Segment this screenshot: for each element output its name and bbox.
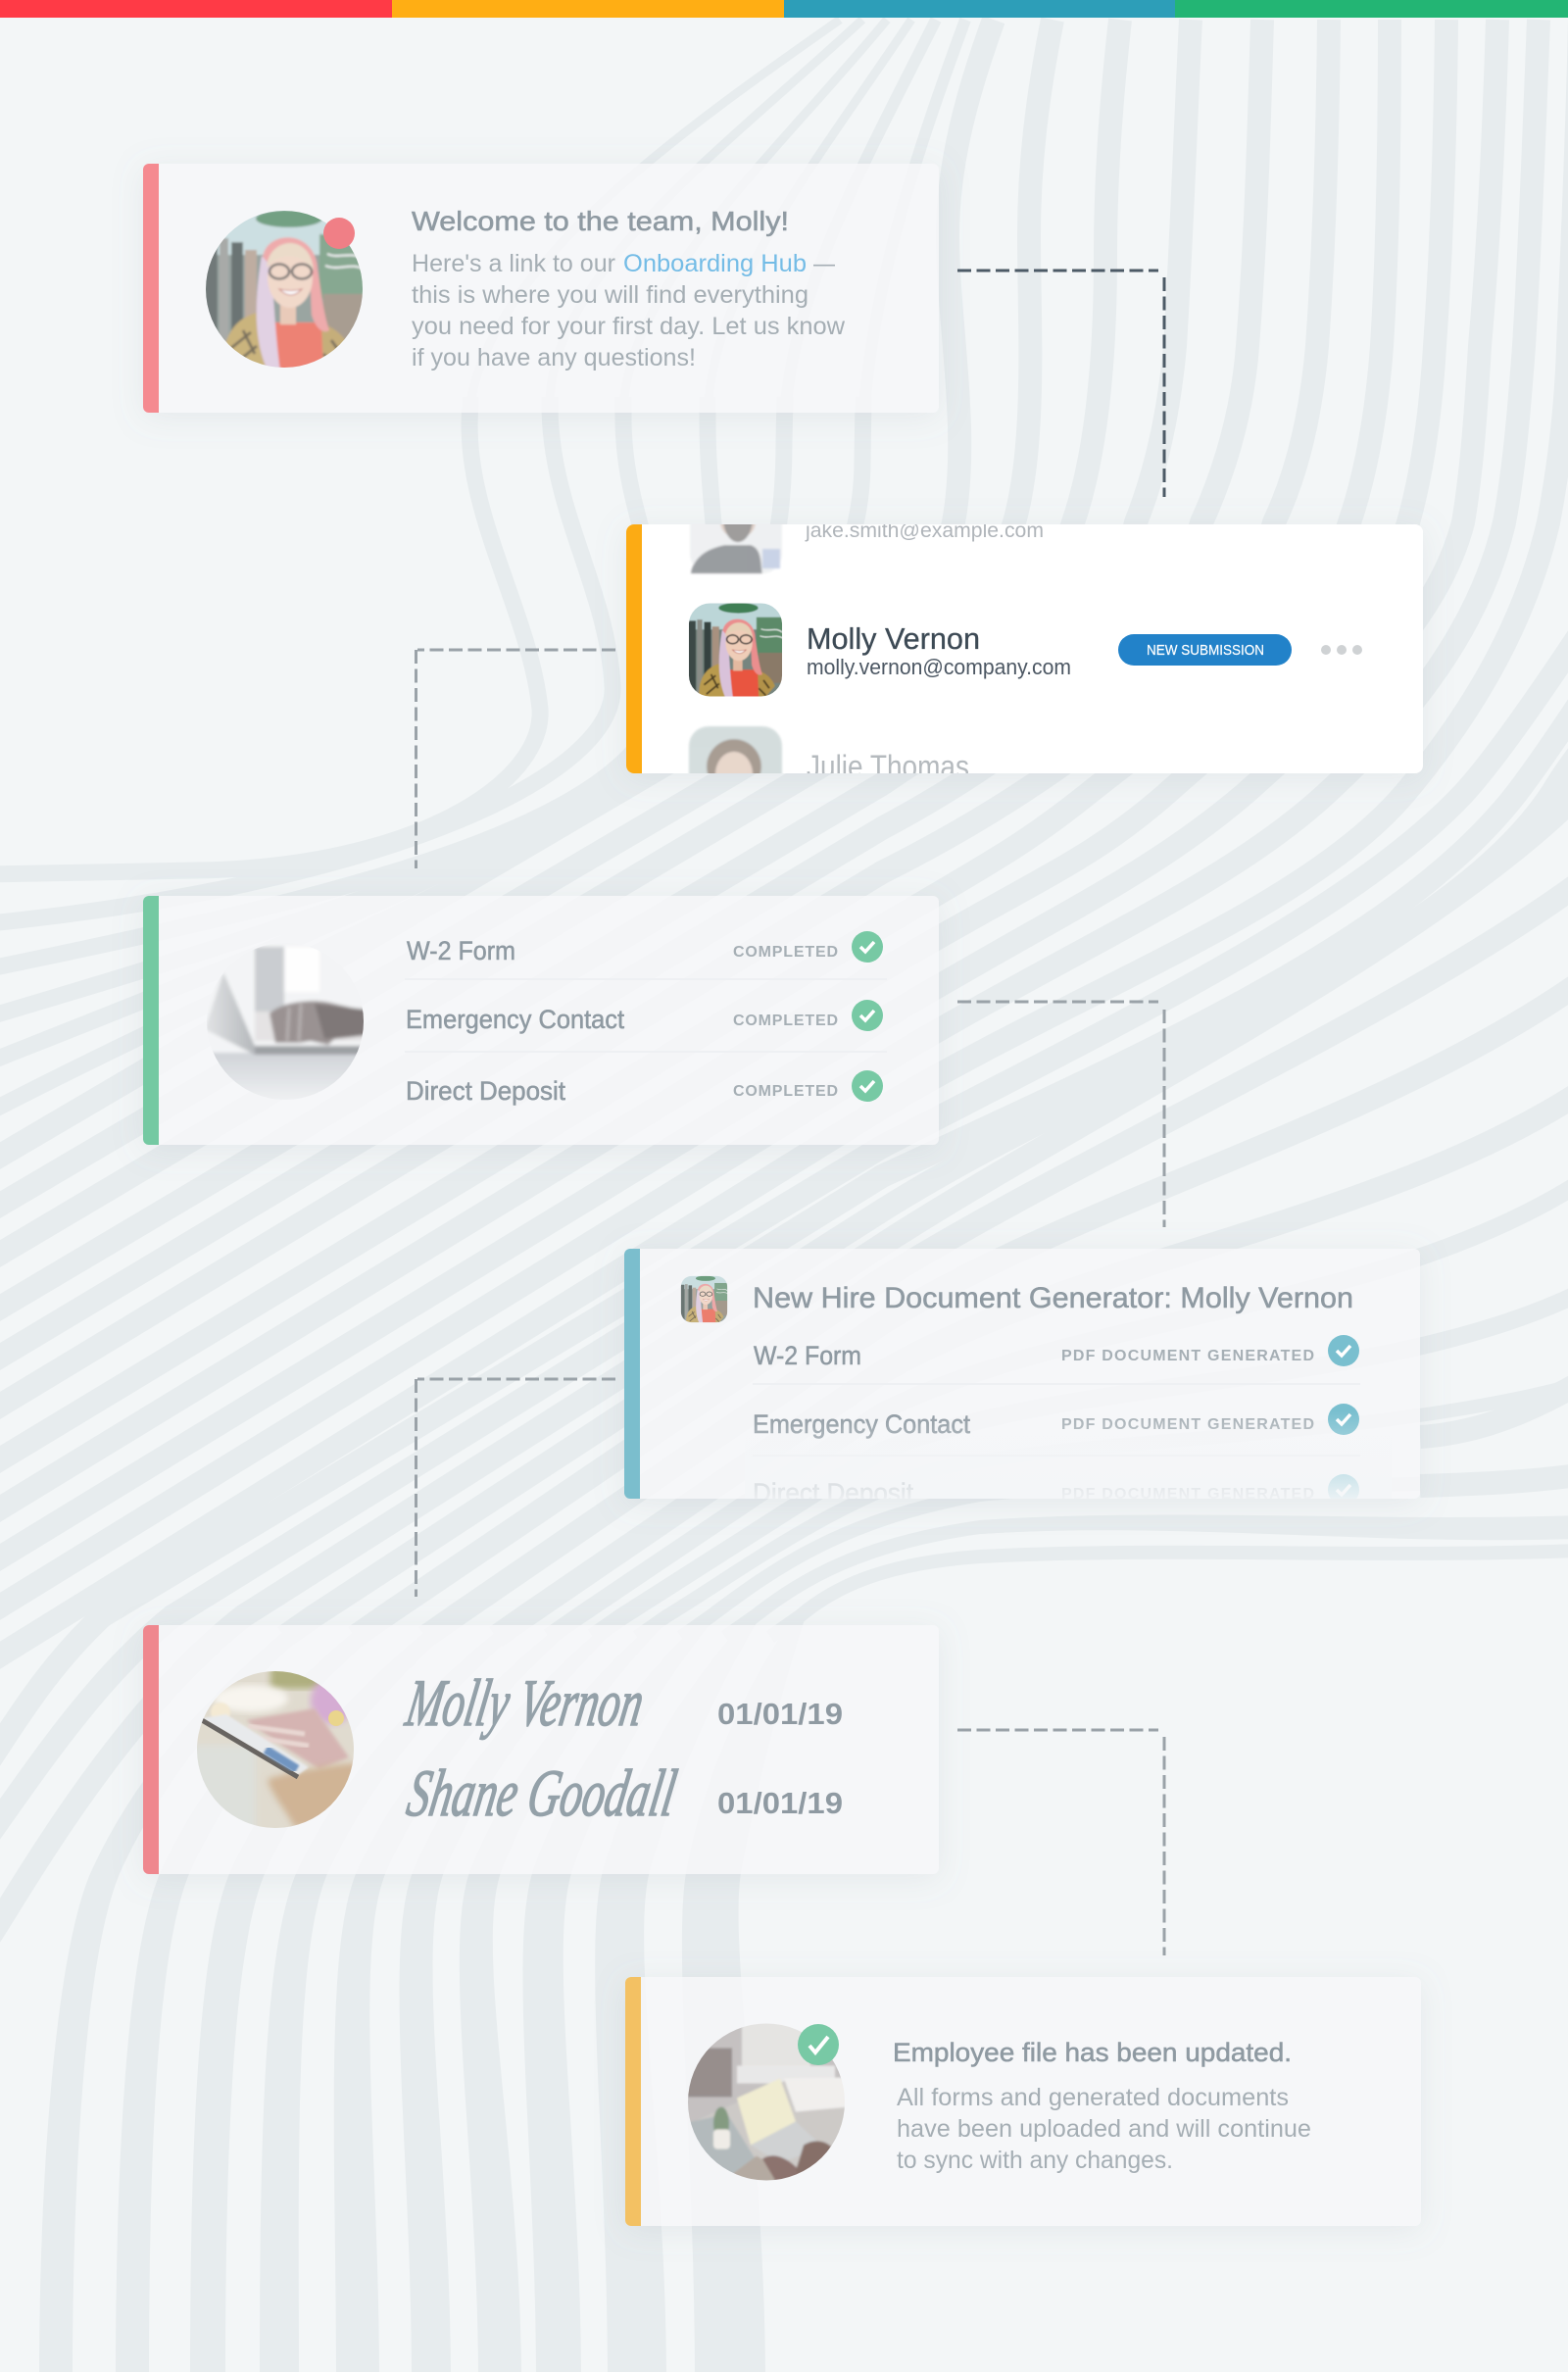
icon: check badge [798,2024,839,2065]
photo: laptop on desk [688,2023,845,2180]
panel: signatures [143,1625,939,1874]
heading: welcome: Welcome to the team, Molly! [412,206,789,236]
signature: Molly Vernon: Molly Vernon [401,1665,650,1740]
list row: Molly Vernon: Molly Vernon [807,621,980,656]
photo: Molly [206,211,363,368]
panel: submissions list [626,524,1423,776]
form row: Direct Deposit [406,1070,883,1106]
form row: Emergency Contact [406,1000,883,1034]
list row: Molly Vernon [686,601,1362,699]
icon: check [852,931,883,963]
connector: welcome card to submissions card [957,271,1164,497]
list row: Molly Vernon: molly.vernon@company.com [807,655,1071,679]
form row: W-2 Form: W-2 Form [407,936,515,965]
message text: Onboarding Hub [623,250,807,277]
icon: check [1328,1335,1359,1366]
avatar: Molly [688,604,782,696]
description text [897,2084,1311,2174]
connector: forms card to document generator card [957,1002,1164,1227]
message text: you need for your first day. Let us know [412,313,846,340]
document row: W-2 Form: PDF DOCUMENT GENERATED [1061,1348,1314,1364]
date: 01/01/19 [717,1786,843,1820]
document row: Emergency Contact: Emergency Contact [753,1409,970,1439]
top colour bar [0,0,1568,18]
form row: Emergency Contact: Emergency Contact [406,1005,624,1034]
heading: document generator: New Hire Document Generator: Molly Vernon [753,1282,1353,1314]
photo: hands typing on laptop [207,945,364,1100]
message text [412,250,846,371]
form row: Direct Deposit: COMPLETED [733,1083,838,1100]
avatar: Molly small [679,1274,729,1324]
panel: employee file updated [625,1977,1421,2226]
notification dot [323,218,355,249]
document row: Emergency Contact: PDF DOCUMENT GENERATED [1061,1416,1314,1433]
connector: signatures card to employee file card [957,1730,1164,1955]
document row: W-2 Form: W-2 Form [754,1341,861,1370]
message text: this is where you will find everything [412,281,808,309]
message text: Here's a link to our [412,250,615,277]
panel: welcome message [143,164,939,413]
icon: check [852,1070,883,1102]
icon: check [852,1000,883,1031]
connector: submissions card to forms card [416,650,615,868]
status badge [1118,634,1292,666]
photo: hand holding phone [197,1671,354,1828]
connector: document generator card to signatures card [416,1379,615,1597]
list row: Jake (faded, clipped): jake.smith@example.com [805,519,1044,542]
form row: W-2 Form: COMPLETED [733,944,838,961]
message text: — [813,250,835,277]
description text: to sync with any changes. [897,2147,1173,2174]
icon: check [1328,1404,1359,1435]
form row: Direct Deposit: Direct Deposit [406,1076,565,1106]
document row: Direct Deposit: PDF DOCUMENT GENERATED [1061,1486,1314,1503]
form row: W-2 Form [407,931,883,965]
icon: check [1328,1474,1359,1499]
document rows [753,1335,1359,1499]
heading: employee file updated: Employee file has been updated. [893,2038,1292,2067]
document row: W-2 Form [753,1335,1359,1366]
document row: Direct Deposit [755,1474,1359,1499]
list row: Julie (faded, clipped) [688,725,968,773]
more menu dots [1321,645,1362,655]
description text: have been uploaded and will continue [897,2115,1311,2143]
description text: All forms and generated documents [897,2084,1289,2111]
document row: Emergency Contact [753,1404,1359,1439]
list row: Julie (faded, clipped): Julie Thomas [807,749,969,784]
panel: completed forms [143,896,939,1145]
signature: Shane Goodall: Shane Goodall [402,1755,682,1830]
list row: Jake (faded, clipped) [690,524,1043,574]
message text: if you have any questions! [412,344,696,371]
panel: new hire document generator [624,1249,1420,1507]
status badge: NEW SUBMISSION [1147,642,1264,659]
date: 01/01/19 [717,1697,843,1731]
form row: Emergency Contact: COMPLETED [733,1013,838,1029]
document row: Direct Deposit: Direct Deposit [753,1478,913,1507]
